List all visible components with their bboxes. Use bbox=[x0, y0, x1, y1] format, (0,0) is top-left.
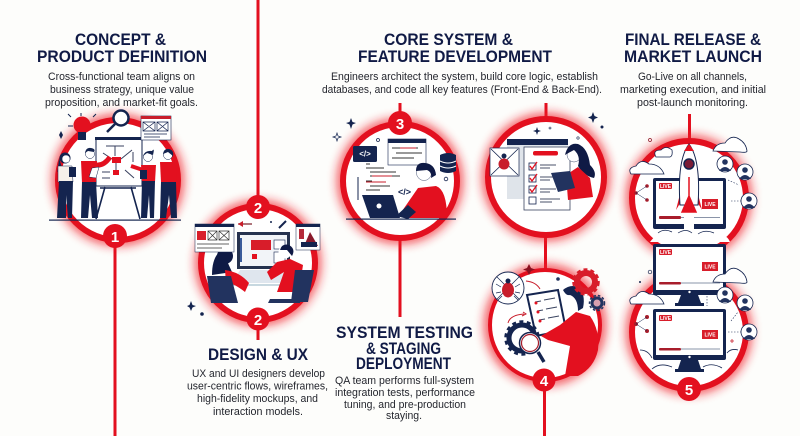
icon: user avatars upper bbox=[717, 156, 757, 209]
icon: clouds bbox=[630, 137, 747, 174]
icon: sparkles bbox=[533, 112, 604, 139]
icon: lower monitor: LIVE bbox=[660, 316, 672, 322]
text block: testing description: integration tests, performance bbox=[335, 387, 475, 399]
icon: developer at laptop: </> bbox=[359, 150, 371, 158]
ring: launch lower bbox=[632, 275, 746, 389]
connector line: step 3 up bbox=[398, 103, 402, 118]
heading: system testing: & STAGING bbox=[366, 339, 441, 358]
icon: gear and magnifier bbox=[506, 322, 544, 362]
text block: testing description: staying. bbox=[386, 410, 422, 422]
panel: system testing and staging deployment bbox=[335, 264, 604, 422]
badge: 2 top: 2 bbox=[254, 200, 262, 217]
connector line: step 3 down bbox=[398, 236, 402, 317]
connector line: step 1 down bbox=[114, 240, 116, 436]
icon: middle monitor: LIVE bbox=[704, 264, 716, 270]
heading: design and UX: DESIGN & UX bbox=[208, 345, 309, 364]
heading: system testing: SYSTEM TESTING bbox=[336, 323, 473, 342]
icon: bug card bbox=[490, 148, 519, 176]
icon: lower monitor: LIVE bbox=[704, 332, 716, 338]
panel: core system and feature development bbox=[322, 30, 604, 238]
heading: core system: FEATURE DEVELOPMENT bbox=[358, 47, 553, 66]
icon: exhaust clouds bbox=[650, 230, 730, 242]
text block: design description bbox=[187, 368, 328, 418]
icon: tester with clipboard bbox=[527, 286, 598, 376]
icon: designers at monitor bbox=[207, 232, 314, 303]
text block: core description: Engineers architect the system, build core logic, establish bbox=[331, 71, 598, 83]
ring: step 4 bbox=[490, 270, 600, 380]
heading: concept: PRODUCT DEFINITION bbox=[37, 47, 207, 66]
icon: upper monitor: LIVE bbox=[704, 202, 716, 208]
text block: design description: UX and UI designers develop bbox=[192, 368, 325, 380]
icon: developer at laptop: </> bbox=[398, 187, 411, 197]
heading: concept: CONCEPT & bbox=[75, 30, 166, 49]
connector line: testing link bbox=[544, 236, 547, 274]
icon: QA checklist and tester bbox=[507, 139, 595, 210]
text block: core description: databases, and code all key features (Front-End & Back-End). bbox=[322, 84, 602, 96]
icon: middle monitor: LIVE bbox=[660, 250, 672, 256]
badge: 2 bottom bbox=[246, 308, 270, 330]
text block: design description: high-fidelity mockups, and bbox=[197, 393, 318, 405]
text block: design description: interaction models. bbox=[213, 406, 303, 418]
badge: 5: 5 bbox=[685, 382, 693, 399]
icon: sparkle bbox=[523, 264, 560, 281]
ring: launch upper bbox=[632, 141, 746, 255]
icon: lower network nodes bbox=[634, 270, 734, 343]
icon: developer at laptop bbox=[346, 139, 456, 220]
text block: launch description bbox=[620, 71, 766, 109]
text block: core description bbox=[322, 71, 602, 96]
badge: 3 bbox=[388, 111, 412, 135]
panel: design and UX bbox=[187, 195, 328, 418]
badge: 3: 3 bbox=[396, 116, 404, 133]
text block: concept description: proposition, and market-fit goals. bbox=[45, 97, 198, 109]
icon: network nodes bbox=[634, 138, 741, 202]
icon: user avatars lower bbox=[707, 287, 757, 340]
badge: 5 bbox=[677, 377, 701, 401]
icon: upper monitor bbox=[653, 178, 726, 229]
heading: system testing bbox=[336, 323, 473, 373]
icon: sparkle bbox=[187, 301, 204, 316]
connector line: step 2 to heading bbox=[256, 320, 260, 340]
connector line: testing circle up bbox=[544, 103, 548, 117]
text block: concept description: Cross-functional team aligns on bbox=[48, 71, 195, 83]
arrows: process arrows bbox=[508, 281, 540, 323]
icon: arrow and pencil bbox=[238, 221, 286, 228]
text block: concept description: business strategy, unique value bbox=[50, 84, 194, 96]
icon: lower clouds bbox=[630, 268, 747, 369]
heading: final release bbox=[624, 30, 762, 66]
ring: step 3 bbox=[343, 124, 457, 238]
icon: sparkles bbox=[333, 118, 448, 181]
icon: middle monitor bbox=[653, 244, 726, 306]
ring: QA review bbox=[488, 119, 604, 235]
panel: final release and market launch bbox=[620, 30, 766, 401]
badge: 2 bottom: 2 bbox=[254, 312, 262, 329]
heading: final release: FINAL RELEASE & bbox=[625, 30, 761, 49]
badge: 1 bbox=[103, 224, 127, 248]
heading: core system bbox=[358, 30, 553, 66]
text block: launch description: post-launch monitoring. bbox=[637, 97, 748, 109]
icon: wireframe card bbox=[141, 116, 171, 140]
text block: testing description bbox=[335, 375, 475, 422]
connector line: rocket up bbox=[688, 114, 691, 144]
text block: concept description bbox=[45, 71, 198, 109]
badge: 4: 4 bbox=[540, 373, 549, 390]
icon: light bulb bbox=[59, 113, 96, 140]
text block: testing description: QA team performs full-system bbox=[335, 375, 474, 387]
text block: design description: user-centric flows, wireframes, bbox=[187, 380, 328, 392]
icon: rocket bbox=[676, 144, 702, 238]
icon: gears bbox=[574, 270, 604, 310]
connector line: top to step 2 bbox=[256, 0, 260, 200]
icon: lower monitor bbox=[653, 309, 726, 372]
panel: concept and product definition bbox=[37, 30, 207, 248]
text block: launch description: marketing execution, and initial bbox=[620, 84, 766, 96]
icon: upper monitor: LIVE bbox=[660, 184, 672, 190]
badge: 1: 1 bbox=[111, 229, 119, 246]
heading: final release: MARKET LAUNCH bbox=[624, 47, 762, 66]
heading: system testing: DEPLOYMENT bbox=[356, 354, 451, 373]
icon: magnifier bbox=[107, 110, 128, 132]
heading: concept bbox=[37, 30, 207, 66]
icon: left wireframe card bbox=[195, 224, 234, 252]
text block: launch description: Go-Live on all channels, bbox=[638, 71, 747, 83]
ring: step 2 bbox=[201, 206, 315, 320]
ring: step 1 bbox=[58, 120, 178, 240]
badge: 2 top bbox=[246, 195, 270, 219]
icon: team at whiteboard bbox=[49, 137, 181, 221]
connector line: step 4 down bbox=[543, 385, 546, 436]
badge: 4 bbox=[532, 368, 556, 392]
icon: bug in circle bbox=[492, 272, 524, 304]
heading: core system: CORE SYSTEM & bbox=[384, 30, 513, 49]
icon: right image card bbox=[296, 224, 320, 250]
text block: testing description: tuning, and pre-production bbox=[344, 399, 466, 411]
